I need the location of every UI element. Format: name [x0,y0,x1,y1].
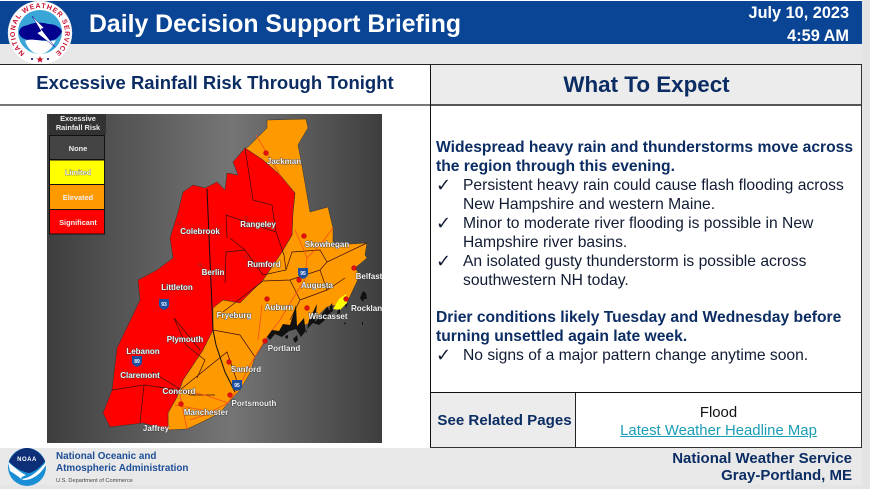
highway shields: 89 [134,359,140,365]
date and time: July 10, 2023 [749,4,849,22]
lead: drier conditions [436,309,841,345]
rule under header [0,64,862,65]
highway shields: 93 [161,302,167,308]
county lines [112,148,367,423]
city labels: Jackman [267,157,301,166]
city labels: Berlin [202,268,224,277]
legend [49,114,106,234]
heading: what to expect [431,65,862,106]
city dots [177,150,356,406]
city labels [120,157,387,433]
NOAA agency text [56,451,188,484]
panel: what to expect [430,65,862,448]
header strip [0,44,862,64]
city labels: Rumford [247,260,281,269]
date and time [748,4,849,45]
bullet: pattern: No signs of a major pattern change anytime soon. [463,347,808,364]
heading: what to expect: What To Expect [563,72,730,97]
bullets: rain impacts: Persistent heavy rain could cause flash flooding across [463,177,844,194]
city labels: Lebanon [126,347,160,356]
NOAA agency text: Atmospheric Administration [56,462,188,474]
highway shields: 95 [234,383,240,389]
yellow area [333,294,347,310]
date and time: 4:59 AM [787,27,849,45]
NOAA agency text: U.S. Department of Commerce [56,478,133,484]
NWS office text [672,450,852,484]
bullets: rain impacts: Hampshire river basins. [463,234,627,251]
icon: NOAA logo: NOAA [17,457,37,463]
related pages label [431,393,576,448]
city labels: Wiscasset [308,312,348,321]
heading rule [0,104,430,106]
footer bar [0,448,862,485]
city labels: Sanford [231,365,261,374]
flood link block: Latest Weather Headline Map [620,423,817,439]
legend: Rainfall Risk [56,123,101,132]
flood link block [620,405,817,439]
legend: Excessive [60,114,96,123]
bullets: rain impacts: southwestern NH today. [463,272,629,289]
icon: NWS logo: NATIONAL WEATHER SERVICE [10,3,70,56]
city labels: Auburn [265,303,293,312]
city labels: Littleton [161,283,193,292]
map: excessive rainfall risk [47,114,382,443]
heading: excessive rainfall: Excessive Rainfall Risk Through Tonight [36,72,394,93]
lead: drier conditions: turning unsettled again late week. [436,328,687,345]
header banner [0,1,862,44]
bullets: rain impacts [436,175,844,289]
coastline islands [267,291,367,343]
highway shields [132,268,308,391]
city labels: Fryeburg [217,311,251,320]
legend: Limited [65,168,92,177]
city labels: Portsmouth [232,399,277,408]
city labels: Manchester [184,408,228,417]
roads [175,135,333,429]
lead: widespread rain: the region through this evening. [436,158,675,175]
city labels: Jaffrey [143,424,170,433]
highway shields: 95 [300,271,306,277]
NWS office text: Gray-Portland, ME [721,467,852,484]
legend: Significant [59,218,97,227]
lead: widespread rain [436,139,853,175]
city labels: Colebrook [180,227,220,236]
bullets: rain impacts: ✓ [436,251,451,272]
NOAA agency text: National Oceanic and [56,451,156,462]
bullets: rain impacts: An isolated gusty thunderstorm is possible across [463,253,806,270]
NWS office text: National Weather Service [672,450,852,467]
city labels: Concord [163,387,196,396]
city labels: Plymouth [167,335,203,344]
bullets: rain impacts: ✓ [436,213,451,234]
city labels: Augusta [301,281,334,290]
orange area [168,119,367,430]
flood link block: Flood [700,405,737,421]
bullet: pattern: ✓ [436,345,451,366]
icon: NOAA logo [8,448,46,486]
legend: None [69,144,87,153]
lead: widespread rain: Widespread heavy rain and thunderstorms move across [436,139,853,156]
city labels: Portland [268,344,300,353]
city labels: Belfast [356,272,382,281]
city labels: Skowhegan [305,240,349,249]
city labels: Claremont [120,371,160,380]
bullets: rain impacts: New Hampshire and western Maine. [463,196,715,213]
related pages row [431,392,862,448]
related pages label: See Related Pages [437,412,572,429]
footer rule [430,447,862,448]
title: Daily Decision Support Briefing [89,11,461,38]
red area [103,148,295,430]
bullets: rain impacts: ✓ [436,175,451,196]
right border [861,65,862,448]
city labels: Rangeley [240,220,276,229]
legend: Elevated [63,193,94,202]
bullets: rain impacts: Minor to moderate river flooding is possible in New [463,215,813,232]
lead: drier conditions: Drier conditions likely Tuesday and Wednesday before [436,309,841,326]
panel: excessive rainfall risk [0,65,430,448]
